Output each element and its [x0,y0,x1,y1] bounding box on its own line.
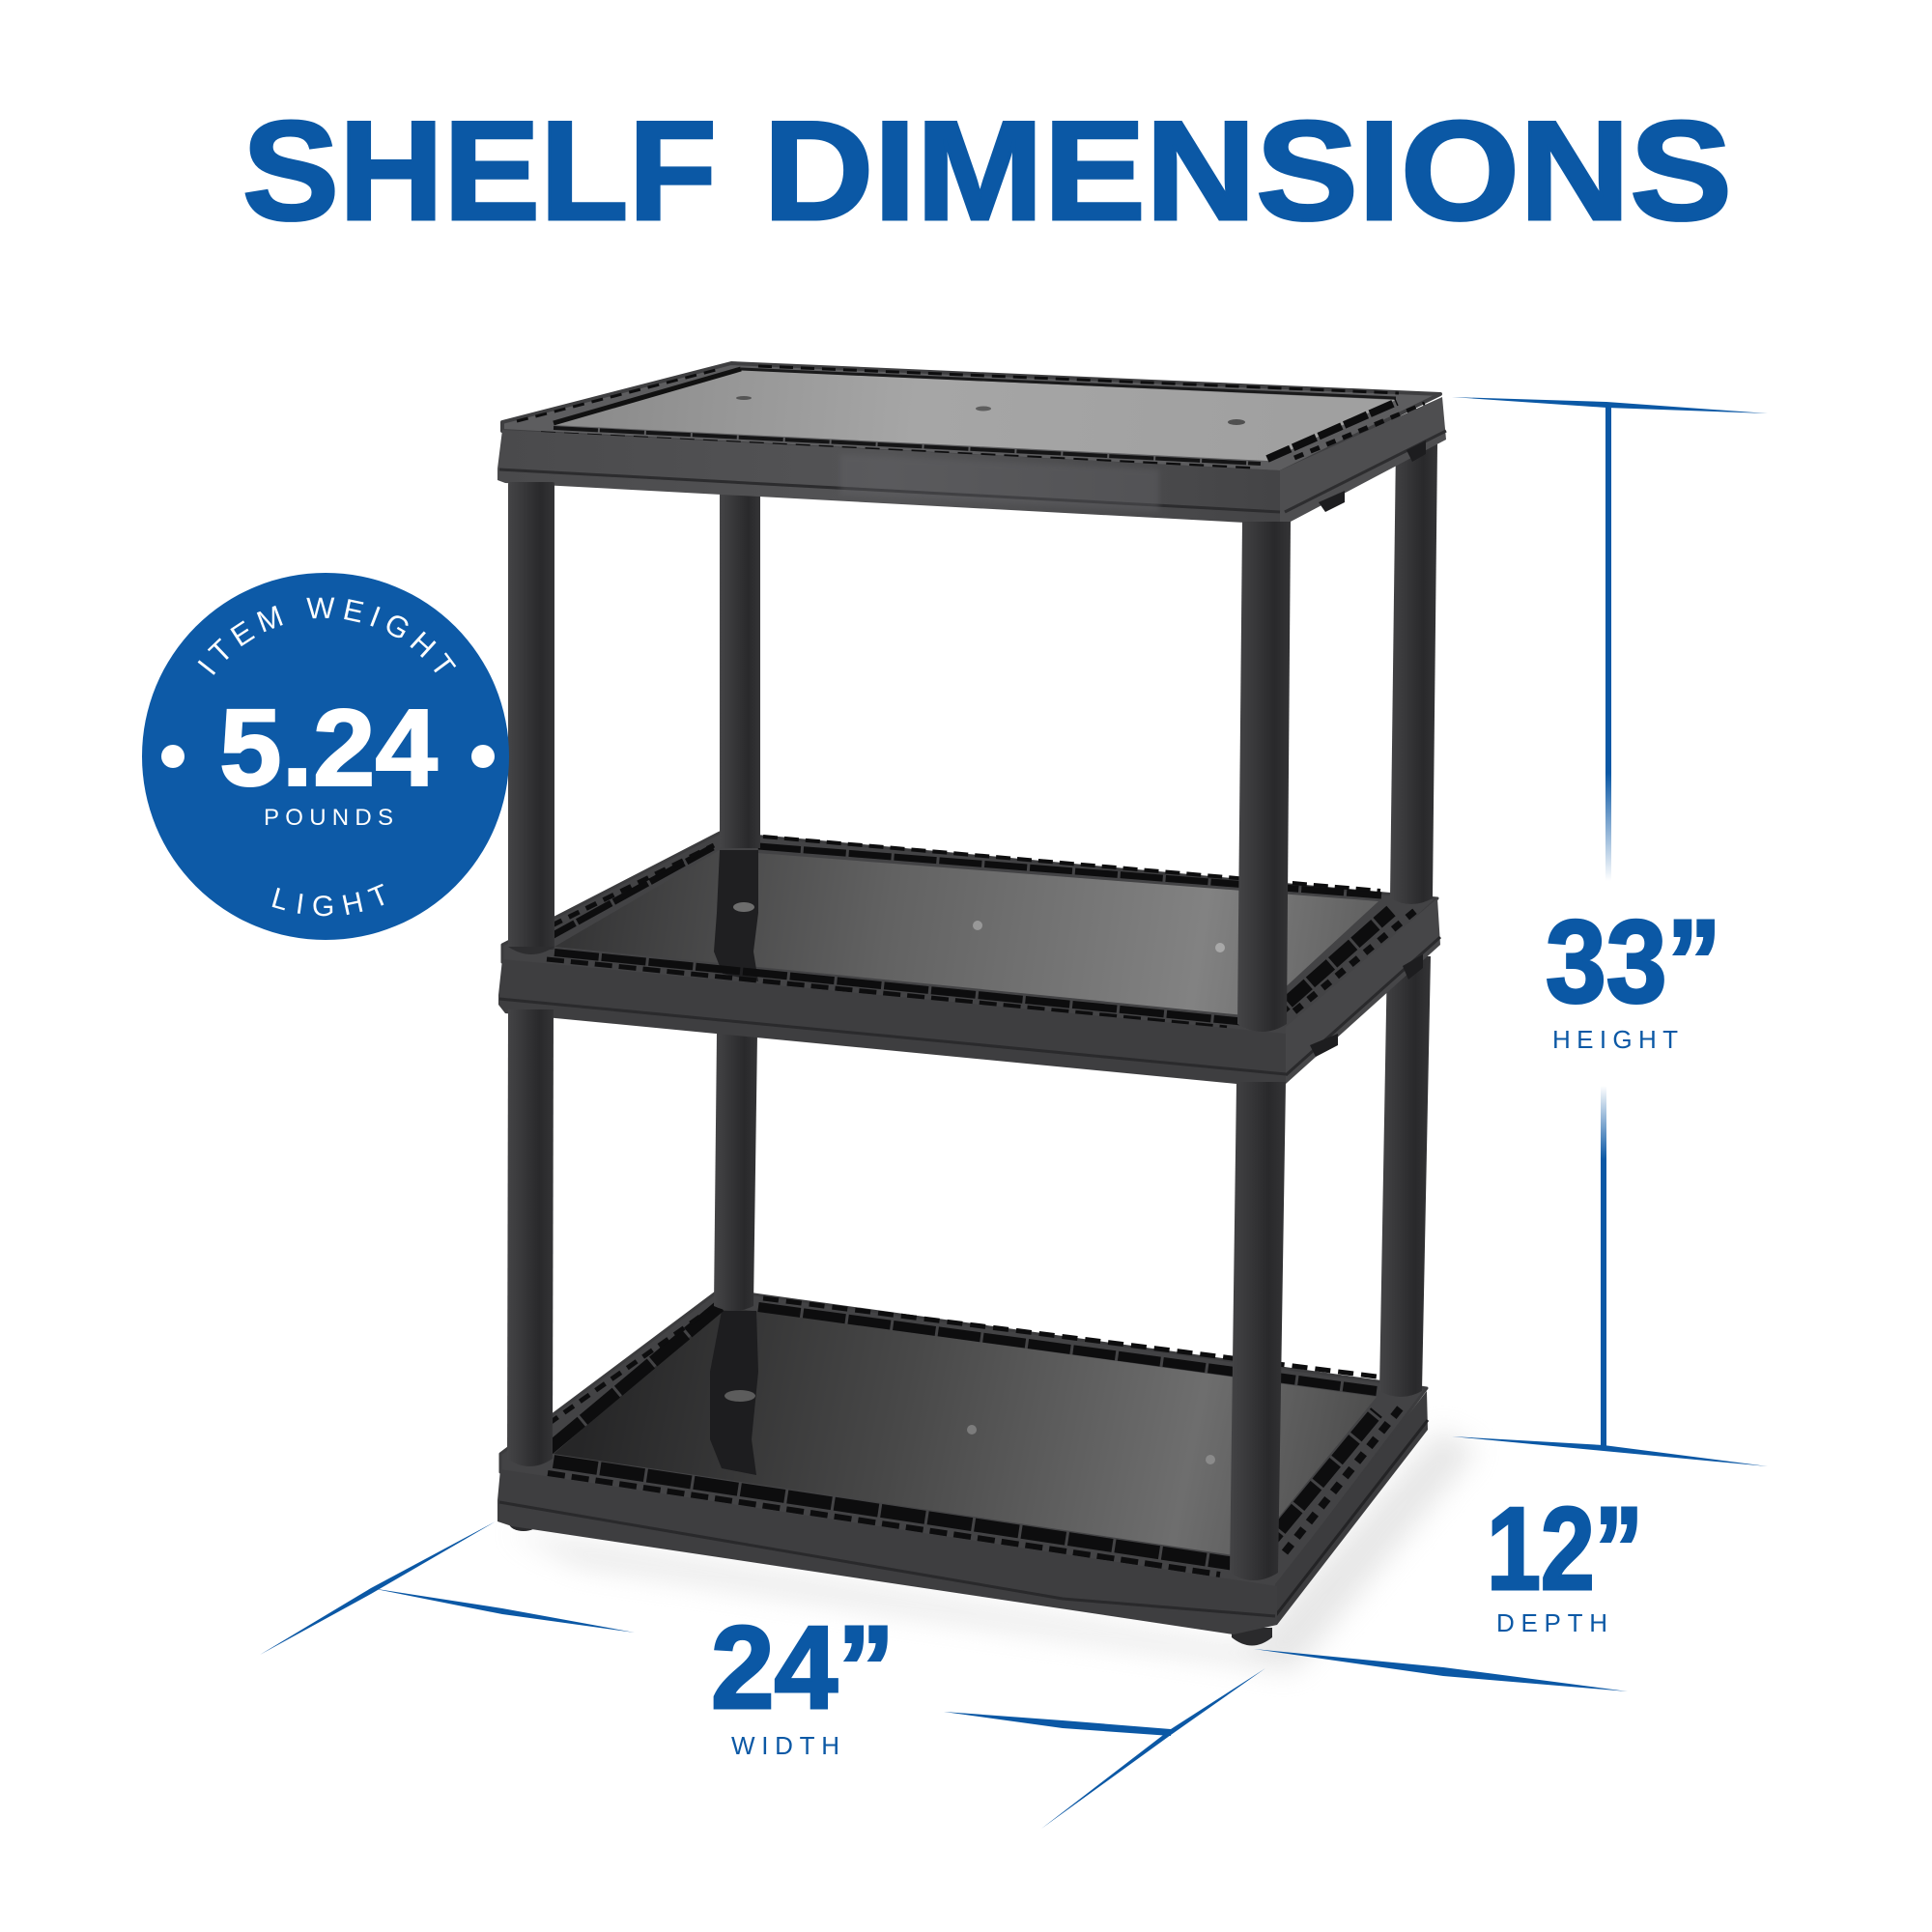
middle shelf [498,833,1440,1084]
height label: HEIGHT [1552,1025,1678,1054]
height value: 33” [1546,895,1721,1027]
shelf unit [497,363,1446,1646]
bottom shelf [497,1290,1428,1646]
top shelf [497,363,1446,523]
title [242,92,1732,249]
dimension lines: width and depth [260,1521,1628,1829]
badge: item weight [142,573,509,940]
title: SHELF [242,92,717,249]
lower legs at back [714,956,1431,1397]
feet [509,1516,1272,1646]
upper front legs [508,482,1291,1032]
depth value: 12” [1487,1483,1643,1614]
badge label: light: LIGHT [272,883,384,916]
width label: WIDTH [731,1731,839,1760]
badge value: 5.24 [219,687,438,809]
floor shadow [507,1430,1478,1671]
shelf clips [1319,440,1426,512]
shelf clips [1310,954,1423,1057]
upper legs at back [720,444,1437,904]
title: DIMENSIONS [763,92,1732,249]
width value: 24” [711,1602,895,1733]
badge unit: POUNDS [264,805,393,831]
depth label: DEPTH [1496,1608,1607,1637]
badge label: item weight: ITEM WEIGHT [197,597,456,675]
lower front legs [507,1009,1286,1580]
dimension lines: height [1452,397,1768,1466]
